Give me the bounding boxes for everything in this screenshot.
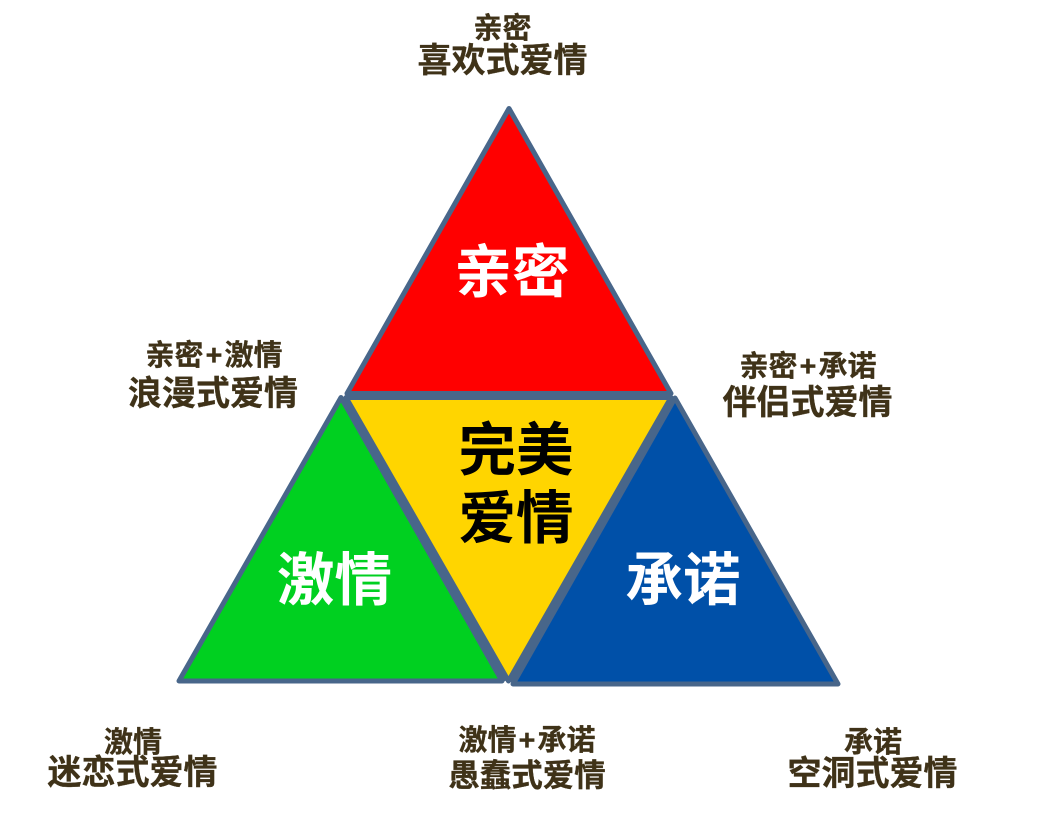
caption: bottom left: 激情 — [104, 726, 162, 759]
caption: right: 亲密+承诺 — [740, 350, 876, 383]
caption: left — [128, 339, 298, 413]
label: perfect love: 完美 — [458, 419, 574, 483]
caption: bottom right: 空洞式爱情 — [788, 755, 958, 793]
caption: bottom right: 承诺 — [844, 726, 902, 759]
caption: bottom center — [448, 724, 606, 793]
triangle: passion — [179, 398, 502, 681]
caption: bottom center: 愚蠢式爱情 — [448, 757, 606, 793]
triangle: intimacy — [347, 108, 671, 394]
triangle: perfect love — [346, 398, 671, 681]
caption: top — [418, 12, 588, 80]
caption: bottom center: 激情+承诺 — [459, 724, 595, 757]
label: commitment: 承诺 — [626, 549, 740, 613]
label: perfect love — [458, 419, 574, 551]
caption: right: 伴侣式爱情 — [722, 384, 892, 422]
label: perfect love: 爱情 — [458, 487, 574, 551]
label: intimacy: 亲密 — [454, 241, 570, 305]
caption: bottom left — [48, 726, 218, 792]
caption: bottom left: 迷恋式爱情 — [48, 754, 218, 792]
caption: left: 浪漫式爱情 — [128, 375, 298, 413]
caption: bottom right — [788, 726, 958, 793]
caption: top: 亲密 — [473, 12, 532, 45]
caption: left: 亲密+激情 — [146, 339, 282, 372]
label: passion: 激情 — [277, 549, 392, 613]
triangle: commitment — [513, 398, 838, 684]
caption: right — [722, 350, 892, 422]
caption: top: 喜欢式爱情 — [418, 42, 588, 80]
